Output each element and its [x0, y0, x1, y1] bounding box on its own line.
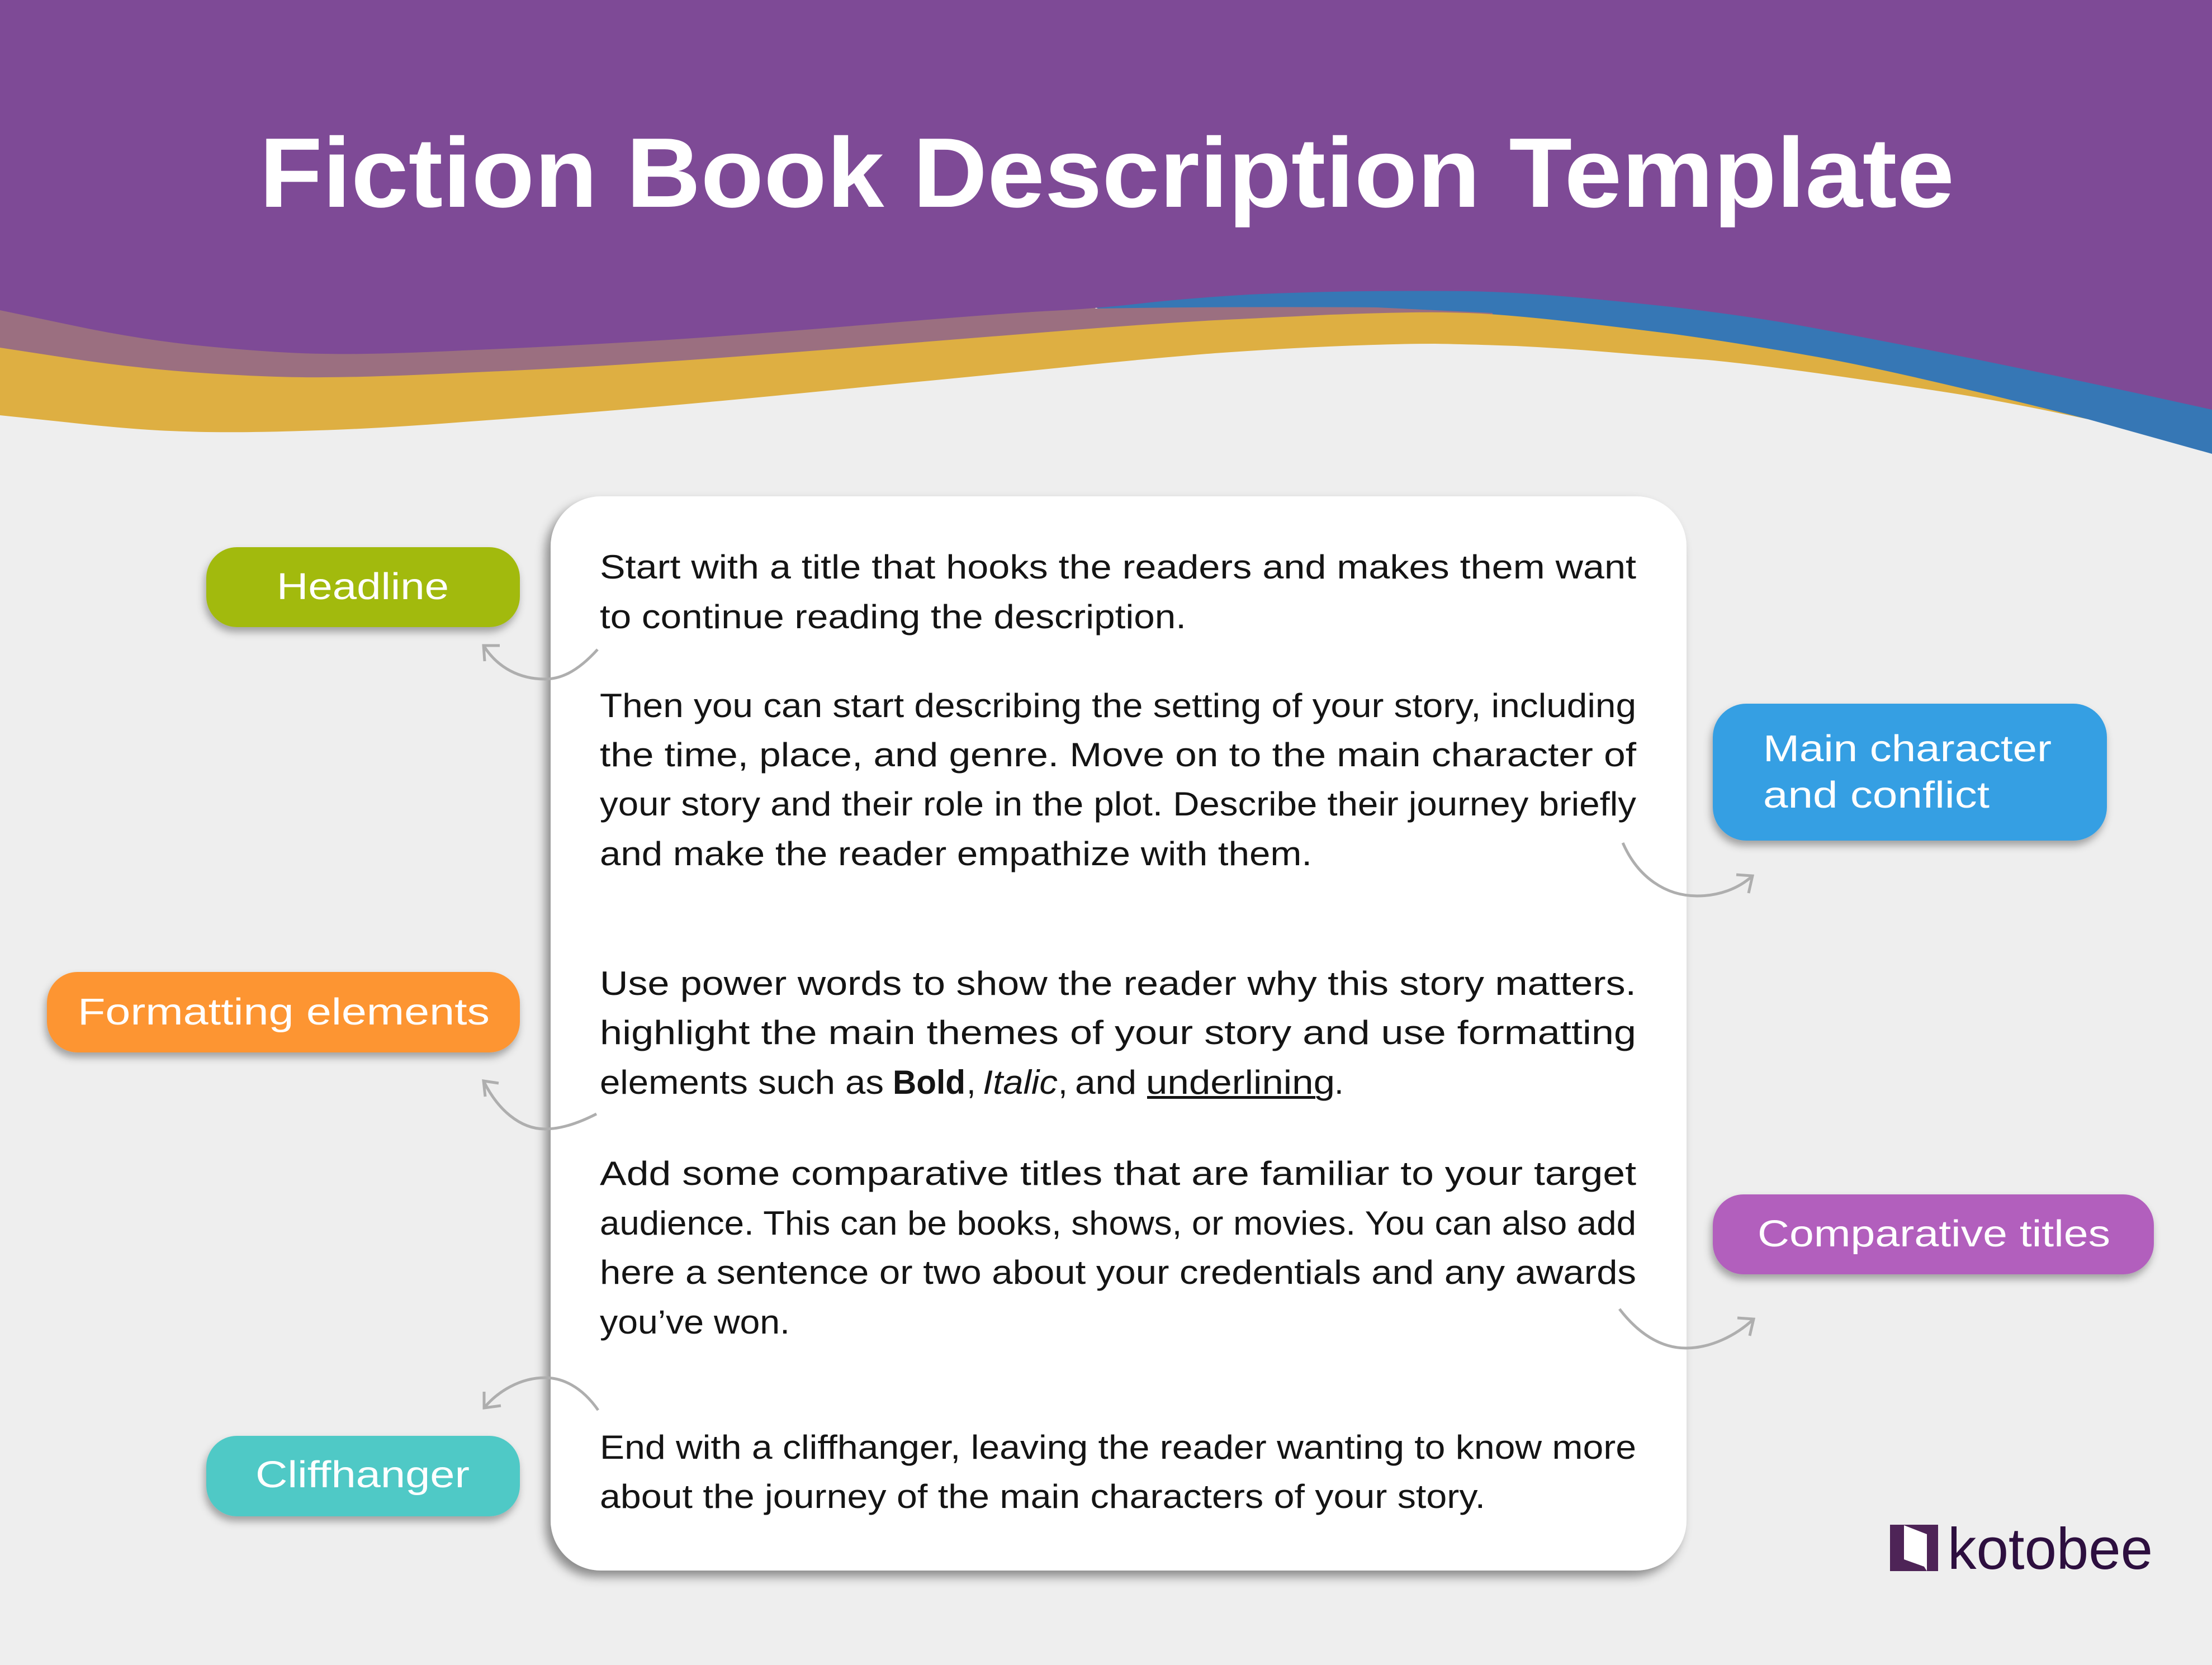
text block: main character paragraph: Then you can start describing the setting of your story, including — [600, 687, 1636, 724]
text block: formatting paragraph: . — [1334, 1064, 1344, 1101]
text block: headline paragraph — [600, 548, 1636, 635]
label: Main character and conflict: Main character — [1763, 728, 2052, 770]
text block: headline paragraph: to continue reading the description. — [600, 598, 1186, 635]
label: Cliffhanger — [206, 1436, 520, 1516]
arrow: to Formatting elements — [484, 1081, 596, 1129]
text block: formatting paragraph: , — [967, 1064, 976, 1101]
label: Headline — [206, 547, 520, 627]
text block: cliffhanger paragraph: End with a cliffhanger, leaving the reader wanting to know more — [600, 1429, 1636, 1466]
text block: headline paragraph: Start with a title that hooks the readers and makes them want — [600, 548, 1636, 586]
text block: comparative titles paragraph: you’ve won. — [600, 1303, 790, 1341]
text block: cliffhanger paragraph — [600, 1429, 1636, 1515]
text block: formatting paragraph: elements such as — [600, 1064, 884, 1101]
text block: main character paragraph: the time, place, and genre. Move on to the main character of — [600, 736, 1636, 774]
text block: comparative titles paragraph — [600, 1155, 1636, 1341]
label: Comparative titles — [1713, 1194, 2154, 1274]
text block: formatting paragraph — [600, 965, 1636, 1101]
label: Formatting elements — [47, 972, 520, 1052]
text block: comparative titles paragraph: Add some comparative titles that are familiar to your target — [600, 1155, 1636, 1192]
label: Headline: Headline — [277, 566, 449, 608]
text block: formatting paragraph: Italic — [983, 1064, 1058, 1101]
text block: formatting paragraph: highlight the main themes of your story and use formatting — [600, 1014, 1636, 1051]
label: Formatting elements: Formatting elements — [78, 991, 490, 1033]
text block: comparative titles paragraph: audience. This can be books, shows, or movies. You can also add — [600, 1204, 1636, 1242]
logo: kotobee: kotobee — [1948, 1516, 2153, 1582]
text block: main character paragraph — [600, 687, 1636, 872]
label: Comparative titles: Comparative titles — [1758, 1213, 2110, 1255]
label: Cliffhanger: Cliffhanger — [255, 1454, 470, 1496]
text block: main character paragraph: and make the reader empathize with them. — [600, 835, 1312, 872]
arrow: to Cliffhanger — [484, 1378, 598, 1410]
text block: formatting paragraph: underlining — [1146, 1064, 1335, 1101]
arrow: to Comparative titles — [1619, 1309, 1754, 1348]
header wave banner — [0, 0, 2212, 454]
label: Main character and conflict — [1713, 704, 2107, 841]
text block: main character paragraph: your story and their role in the plot. Describe their journey briefly — [600, 785, 1636, 823]
title: Fiction Book Description Template — [259, 117, 1954, 228]
label: Main character and conflict: and conflict — [1763, 774, 1990, 816]
text block: formatting paragraph: and — [1075, 1064, 1136, 1101]
arrow: to Headline — [484, 646, 598, 679]
text block: comparative titles paragraph: here a sentence or two about your credentials and any awards — [600, 1254, 1636, 1291]
arrow: to Main character — [1623, 843, 1752, 896]
text block: formatting paragraph: Bold — [893, 1064, 965, 1101]
text block: cliffhanger paragraph: about the journey of the main characters of your story. — [600, 1478, 1485, 1515]
panel: description card — [551, 496, 1687, 1571]
text block: formatting paragraph: Use power words to show the reader why this story matters. — [600, 965, 1636, 1002]
text block: formatting paragraph: , — [1058, 1064, 1068, 1101]
